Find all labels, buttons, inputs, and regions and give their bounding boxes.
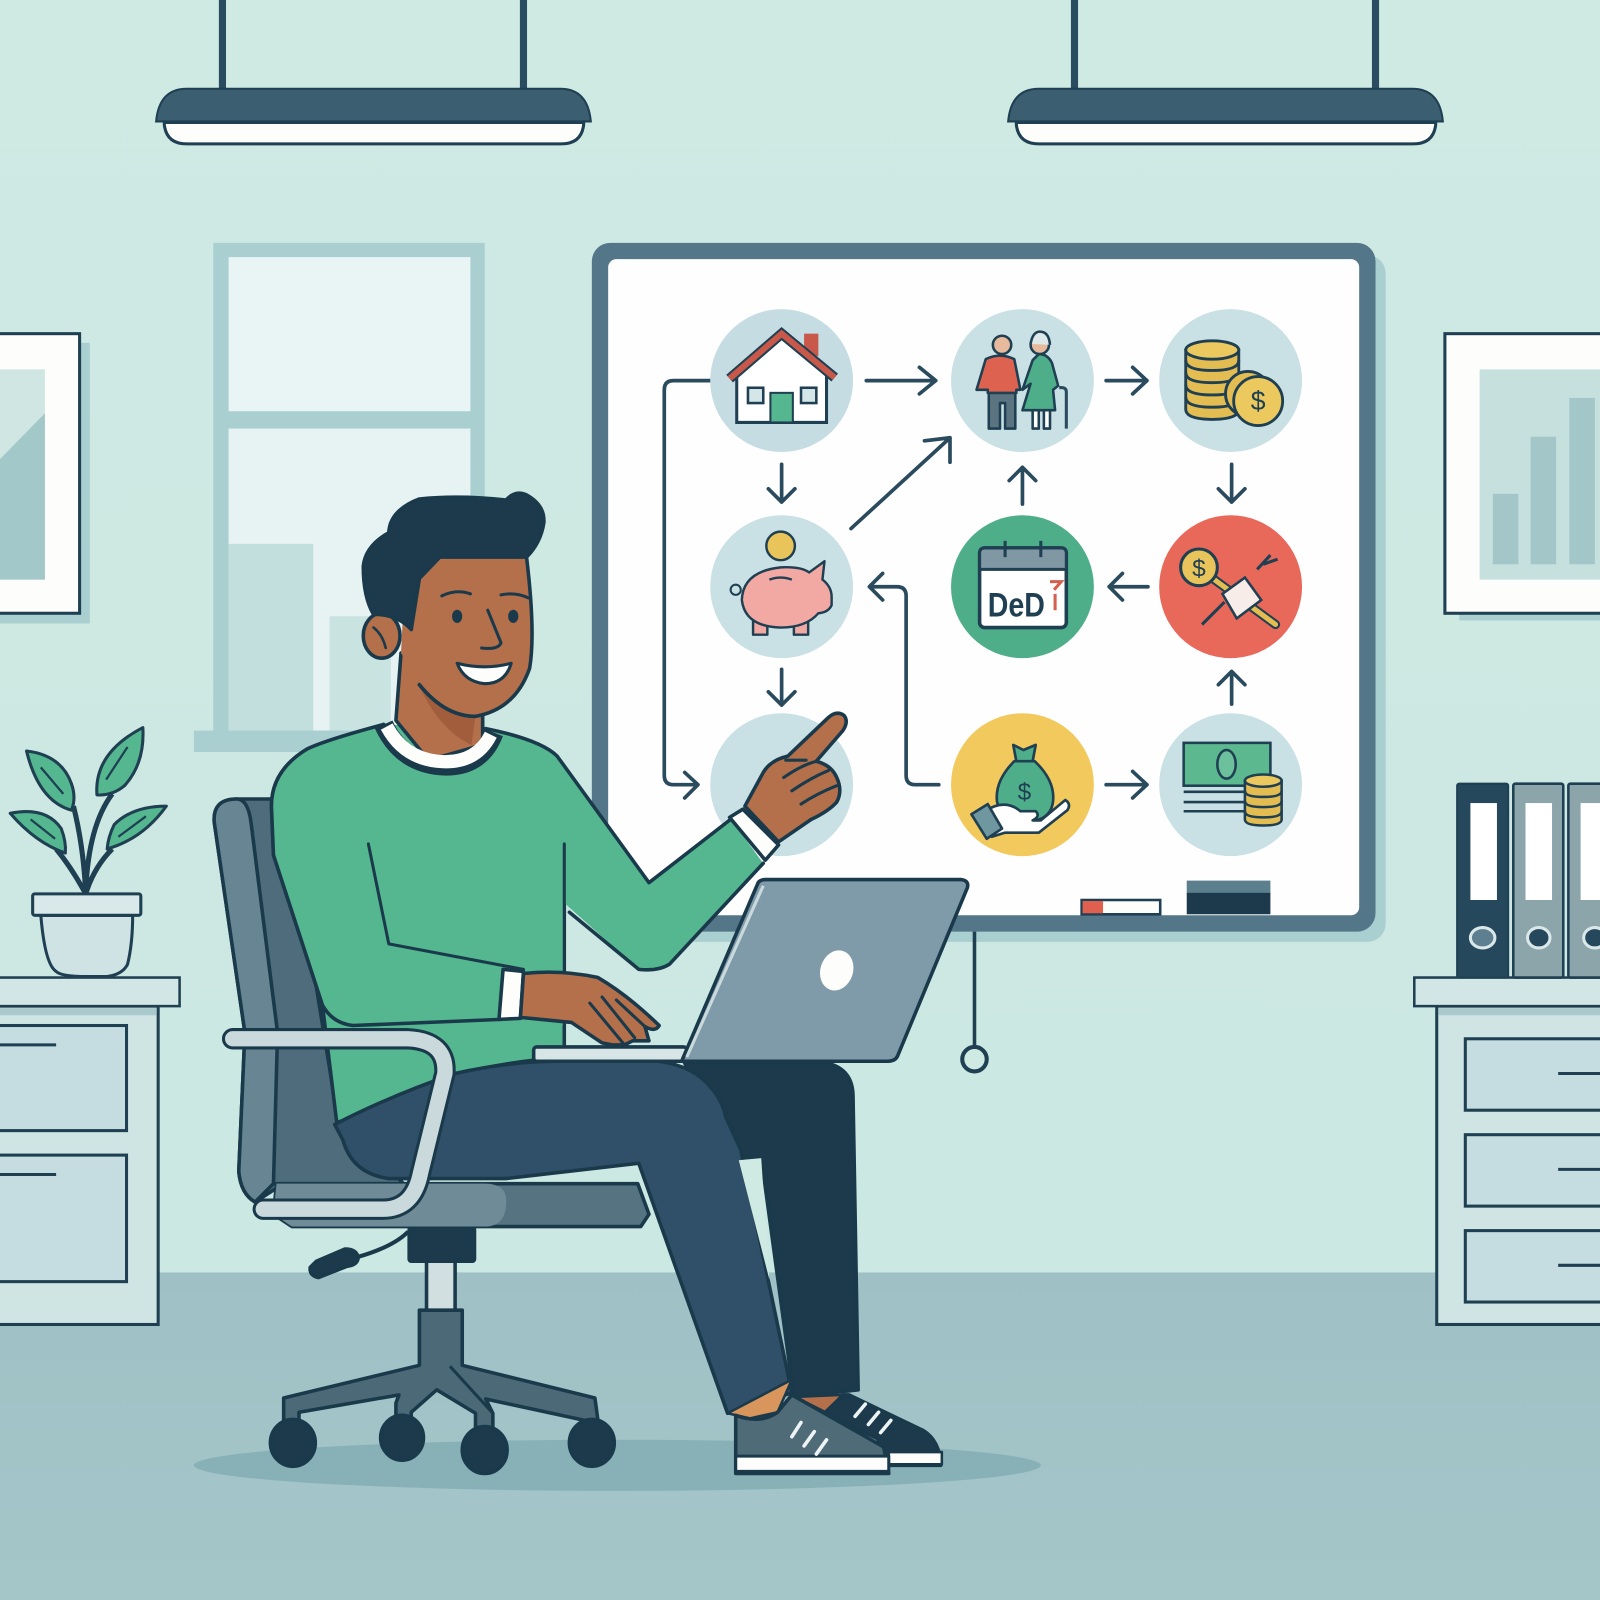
flow node: calendar: DeD <box>988 586 1045 624</box>
flow node: banknote and coins <box>1159 713 1302 856</box>
whiteboard marker <box>1082 900 1160 914</box>
floor <box>0 1272 1600 1600</box>
left desk <box>0 978 180 1324</box>
front shoe <box>736 1395 889 1473</box>
wall <box>0 0 1600 1273</box>
nose <box>482 610 501 648</box>
flow arrows <box>664 367 1245 798</box>
wall picture left <box>0 334 90 623</box>
mouth <box>457 663 511 684</box>
potted plant <box>10 728 166 977</box>
flow node: crossed out coin: $ <box>1192 556 1206 583</box>
flow node: coin stack: $ <box>1251 386 1266 416</box>
whiteboard eraser <box>1187 881 1270 914</box>
laptop base <box>534 1047 687 1061</box>
floor shadow <box>194 1440 1041 1491</box>
whiteboard <box>592 243 1386 1071</box>
front sock <box>728 1380 792 1418</box>
laptop screen <box>682 880 968 1061</box>
ceiling lamp right <box>1008 0 1443 144</box>
whiteboard stand pole <box>962 932 987 1071</box>
smile line <box>419 685 476 716</box>
armrest <box>233 1039 445 1209</box>
neck <box>396 653 483 760</box>
leg gap <box>739 1158 769 1280</box>
back sock <box>794 1395 843 1412</box>
binders <box>1457 784 1600 978</box>
right desk <box>1414 978 1600 1324</box>
window <box>194 243 485 752</box>
ceiling lamp left <box>156 0 591 144</box>
eyebrows <box>442 592 529 598</box>
chair base <box>284 1228 598 1431</box>
flow node: hidden node behind hand <box>710 713 853 856</box>
hair <box>363 493 544 630</box>
face <box>401 551 533 716</box>
pointing arm cuff <box>730 809 779 860</box>
torso <box>271 724 564 1122</box>
front leg <box>335 1061 792 1413</box>
wall picture right with bar chart <box>1445 334 1600 620</box>
office chair <box>214 799 649 1473</box>
keyboard hand <box>520 972 659 1045</box>
flow node: coin stack <box>1159 309 1302 452</box>
flow node: money bag in hand: $ <box>1018 779 1032 806</box>
eyes <box>452 610 518 623</box>
person <box>271 493 942 1473</box>
flow node: house <box>710 309 853 452</box>
back leg <box>685 1063 858 1397</box>
back shoe <box>796 1395 941 1465</box>
flow node: money bag in hand <box>951 713 1094 856</box>
collar <box>384 724 494 766</box>
chair wheels <box>270 1415 614 1473</box>
chair seat <box>273 1184 649 1227</box>
flow node: elderly couple <box>951 309 1094 452</box>
torso upper and pointing arm <box>271 724 763 1026</box>
flow node: crossed out coin <box>1159 515 1302 658</box>
binder grey cropped <box>1568 784 1600 978</box>
binder grey <box>1513 784 1563 978</box>
laptop logo <box>815 946 859 995</box>
pointing hand <box>745 713 846 842</box>
binder dark <box>1457 784 1508 978</box>
chair back <box>214 799 408 1202</box>
shoe laces <box>792 1404 891 1454</box>
ear <box>363 613 400 658</box>
flow node: piggy bank <box>710 515 853 658</box>
left sleeve cuff <box>499 969 523 1019</box>
flow node: calendar <box>951 515 1094 658</box>
laptop <box>534 880 968 1061</box>
